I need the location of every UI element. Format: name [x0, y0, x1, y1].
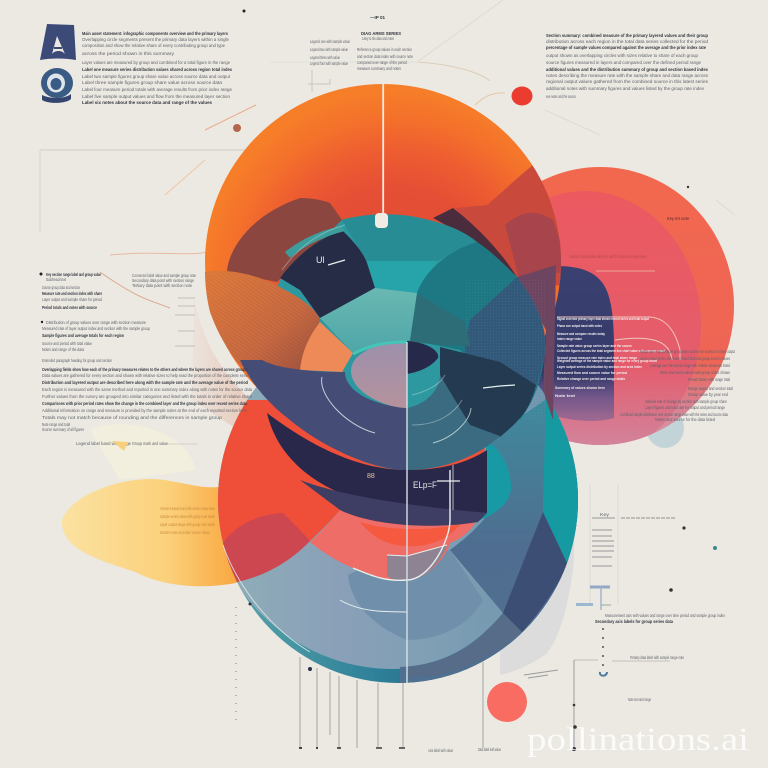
panel text: white lines on navy: Note text: [555, 394, 576, 398]
text block: top middle: Legend four with sample value: [310, 61, 348, 66]
text block: top right: Section summary: combined measure of the primary layered values and their group: [546, 33, 708, 38]
labels on yellow: Legend label band with range: [76, 441, 132, 446]
dark triangle behind teal disc: [433, 208, 517, 277]
panel text: white lines on navy: Layer output series distribution by section and area index: [557, 365, 643, 369]
text lines lower right: Secondary axis labels for group series data: [595, 619, 673, 624]
lower right dark lens: [440, 347, 536, 437]
text block: top left: Layer values are measured by group and combined for a total figure in the range: [82, 60, 231, 65]
panel text: white lines on navy: Measured flow and source value for period: [557, 371, 628, 375]
circle: bottom large disc: [218, 385, 578, 683]
logo: ring O: [41, 68, 73, 103]
plum overlap beside teal disc: [517, 265, 556, 420]
small glyphs on navy band: [316, 255, 460, 510]
teal arc highlight: [285, 226, 345, 258]
text block: top right: source figures measured in layers and compared over the defined period range: [546, 60, 702, 65]
dot: salmon circle: [487, 682, 527, 722]
text block: left wide paragraph: Note range and total: [42, 422, 70, 427]
panel text: white lines on navy: Index range value: [557, 337, 582, 341]
text block: left middle: [41, 320, 150, 352]
orange-brown hatched blob: [205, 271, 320, 375]
labels on yellow: Group mark and value: [132, 441, 168, 446]
text block: left middle: Source and period with total value: [42, 341, 92, 346]
text block: left wide paragraph: [42, 358, 253, 432]
panel text: white lines on navy: Weighted average of the sample value and range for every group listed: [557, 359, 658, 363]
labels on yellow: Sample series value with group note totals: [160, 514, 216, 519]
text block: top left: Label three sample figures group share value across source data: [82, 80, 223, 85]
label lines on coral: Section heading value label text with the index and range notes: [570, 254, 646, 259]
text block: left upper: Layer output and sample share for period: [42, 297, 102, 302]
disc left red field: [205, 400, 490, 583]
decorative dots: [233, 10, 717, 592]
text block: left wide paragraph: Overlapping fields show how each of the primary measures relates to the others and where the layers are shared across groups: [42, 367, 247, 372]
text block: top middle: DIAG ARMS SERIES: [361, 31, 401, 36]
text lines lower right: Note text and range: [628, 697, 651, 702]
text block: top left: Label five sample output values and flow from the measured layer section: [82, 94, 231, 99]
disc teal strip left: [480, 440, 511, 520]
text block: left upper: [40, 272, 102, 310]
text block: left wide paragraph: Extended paragraph heading for group and section: [42, 358, 112, 363]
text block: left short column: Tertiary data point with section note: [132, 283, 192, 288]
text block: left wide paragraph: Source summary of all figures: [42, 427, 85, 432]
text block: top right: regional output values gathered from the combined source in this latest series: [546, 79, 709, 84]
coral inner pink circle: [549, 191, 701, 445]
panel text: white lines on navy: Signal overview primary layer data stream record series and total output: [557, 317, 650, 321]
brown shape upper left: [227, 198, 342, 282]
text block: left upper: Measure rate and section index with share: [42, 291, 102, 296]
side text over coral edge: Layer output series distribution band total and group section values: [640, 356, 731, 361]
text block: top left: Overlapping circle segments present the primary data layers within a single: [82, 37, 230, 42]
thin connector lines: [40, 0, 735, 308]
pale blue blob under coral circle: [646, 408, 684, 448]
disc lower pale blue field: [218, 385, 578, 669]
overlap shadow orange on coral: [455, 166, 561, 286]
text block: top left: Main asset statement: infographic components overview and the primary layers: [82, 31, 228, 36]
text block: top middle: Legend two with sample value: [310, 47, 348, 52]
bottom vertical lines with labels: Data label with value: [478, 747, 501, 752]
text block: left wide paragraph: Comparisons with prior period rates show the change in the combined layer and the group index over recent series data: [42, 401, 247, 406]
teal dark band upper: [342, 214, 477, 262]
dot: red-orange blob: [512, 86, 532, 106]
text block: top right: [546, 33, 709, 99]
label lines on coral: Key Art note: [667, 216, 689, 221]
navy sector upper left: [280, 230, 375, 318]
text block: top right: additional notes with summary figures and values listed by the group rate index: [546, 86, 705, 91]
text block: top middle: —IP 01: [370, 15, 386, 20]
small glyphs on navy band: Ul: [316, 255, 324, 265]
text block: top middle: Legend one with sample value: [310, 39, 350, 44]
watermark: pollinations.ai: [527, 722, 749, 758]
bottom vertical lines with labels: Axis label with value: [428, 748, 453, 753]
panel text: white lines on navy: [555, 317, 666, 398]
panel text: white lines on navy: Relative change over period and range totals: [557, 377, 625, 381]
small glyphs on navy band: 88: [367, 473, 375, 480]
text block: top left: composition and show the relative share of every contributing group and type: [82, 43, 226, 48]
light orange facet: [300, 322, 353, 372]
text block: top right: percentage of sample values compared against the average and the prior index rate: [546, 45, 707, 50]
side text over coral edge: Notes and source for the data listed: [655, 417, 715, 422]
side text over coral edge: Ratio and trend values with group notes shown: [660, 370, 730, 375]
text lines lower right: Tertiary data label with sample range note: [630, 655, 684, 660]
text block: top left: Label six notes about the source data and range of the values: [82, 100, 213, 105]
text block: left short column: [132, 273, 196, 346]
panel text: white lines on navy: Collected figures across the total segment line chart value with average result: [557, 349, 666, 353]
label lines on coral: [570, 216, 689, 271]
navy rounded panel: [520, 266, 614, 421]
panel text: white lines on navy: Summary of values shown here: [555, 386, 605, 390]
haze of dithered text left of the main circles: [192, 295, 262, 428]
disc right navy wedge: [503, 512, 568, 632]
navy wave body: [240, 360, 500, 470]
yellow blob: [62, 424, 240, 586]
text block: top right: see notes and the source: [546, 94, 576, 99]
dark navy band: [267, 413, 487, 526]
disc right blue field: [400, 400, 578, 683]
text block: top right: notes describing the measure rate with the sample share and data range across: [546, 73, 709, 78]
text block: left short column: Secondary data point with section range: [132, 278, 194, 283]
text block: left wide paragraph: Data values are gathered for every section and shown with relative sizes to help read the proportion of the complete series: [42, 373, 251, 378]
text block: top left: across the period shown in this summary: [82, 51, 175, 56]
teal disc: [247, 214, 545, 470]
faint shaded column bottom right: [500, 490, 574, 675]
disc coral crescent: [310, 510, 477, 580]
panel text: white lines on navy: Second group measure rate index and total share range: [557, 356, 637, 360]
text block: top middle: compared over range of the period: [357, 60, 407, 65]
text block: left upper: Key section range label and group value: [46, 272, 101, 277]
small glyphs on navy band: ELp=F: [413, 480, 437, 490]
text block: left wide paragraph: Additional information on range and measure is provided by the sample notes at the end of each reported section here: [42, 408, 247, 413]
panel text: white lines on navy: Sample rate value group series layer and the source: [557, 344, 632, 348]
text block: top middle: a key to the data and notes: [362, 36, 394, 41]
logo: block A: [40, 24, 76, 60]
side text over coral edge: Average over the period range with relative measures listed: [650, 363, 730, 368]
panel text: white lines on navy: Phase one output band with notes: [557, 324, 602, 328]
bottom vertical lines with labels: [236, 602, 501, 753]
circle: coral: [542, 167, 734, 445]
curved white line on coral: [557, 317, 680, 360]
text block: left short column: Connector label value and sample group note: [132, 273, 196, 278]
center oval with dark pupil: [351, 341, 438, 408]
labels on yellow: Amount measure band with section range value: [160, 506, 215, 511]
text block: top middle: and section data index with source note: [357, 54, 413, 59]
text block: left upper: Source group data and section: [42, 285, 80, 290]
text block: top right: distribution across each region in the total data series collected for the period: [546, 39, 709, 44]
labels on yellow: [76, 441, 216, 535]
text block: top left: Label four measure period totals with average results from prior index range: [82, 87, 233, 92]
text block: left middle: Measured rate of layer output index and section with the sample group: [42, 326, 150, 331]
text block: left middle: Notes and range of the data: [42, 347, 84, 352]
side text over coral edge: Range output and section total: [688, 386, 733, 391]
logo mark: [40, 24, 76, 103]
text block: left wide paragraph: Totals may not match because of rounding and the differences in sample group: [42, 415, 223, 420]
right half wave: [407, 375, 500, 470]
disc inner darker oval: [348, 550, 483, 640]
teal bright band: [367, 261, 437, 293]
disc right teal band: [543, 396, 578, 563]
side text over coral edge: Group value by year end: [688, 392, 728, 397]
text lines lower right: Measurement axis with values and range over time period and sample group index: [605, 613, 726, 618]
column chart text bottom right: Key: [600, 512, 610, 517]
labels on yellow: Section notes and other source values: [160, 530, 211, 535]
text block: left wide paragraph: Each region is measured with the same method and reported in one summary index along with notes for the source data: [42, 387, 252, 392]
side text over coral edge: Indexed rate of change by section with sample group share: [645, 399, 727, 404]
teal right lens: [410, 242, 545, 420]
circle: orange: [205, 84, 561, 389]
inner teal cone: [320, 288, 417, 353]
text block: left middle: Sample figures and average totals for each region: [42, 333, 124, 338]
text block: top middle: measure summary and notes: [357, 66, 402, 71]
text block: top left: Label two sample figures group share value across source data and output: [82, 74, 231, 79]
side text over coral edge: Period shown with range total: [688, 377, 730, 382]
text block: top middle: [308, 15, 413, 92]
text block: top middle: Reference group values in each section: [357, 47, 412, 52]
text block: top right: output shown as overlapping circles with sizes relative to share of each group: [546, 53, 699, 58]
column chart text bottom right: [576, 485, 675, 610]
lower vertical axis line: [406, 342, 408, 683]
text lines lower right: [524, 613, 726, 751]
disc dark red band: [218, 513, 310, 583]
side text over coral edge: Layer figures and total rate for output and period range: [645, 405, 725, 410]
labels on yellow: Layer output range with group note totals: [160, 522, 216, 527]
text block: top left: [82, 31, 233, 105]
hatched blue-grey area: [465, 277, 545, 425]
text block: left middle: Distribution of group values over range with section measure: [46, 320, 146, 325]
text block: top middle: Legend three with value: [310, 55, 340, 60]
side text over coral edge: [620, 349, 735, 422]
white circuit arcs: [223, 225, 515, 652]
text block: left wide paragraph: Distribution and layered output are described here along with the sample rate and the average value of the period: [42, 380, 248, 385]
panel text: white lines on navy: Measure and compare results today: [557, 332, 606, 336]
text block: left wide paragraph: Further values from the survey are grouped into similar categories and listed with the totals in order of relative share: [42, 394, 253, 399]
main vertical axis line with knob: [375, 84, 388, 228]
text block: left upper: Period totals and notes with source: [42, 305, 97, 310]
icon: small ring marker: [600, 672, 607, 676]
text block: top left: Label one measure series distribution values shared across region total index: [82, 67, 233, 72]
text block: top right: additional values and the distribution summary of group and section based index: [546, 67, 709, 72]
text block: left upper: Subhead text: [46, 277, 67, 282]
